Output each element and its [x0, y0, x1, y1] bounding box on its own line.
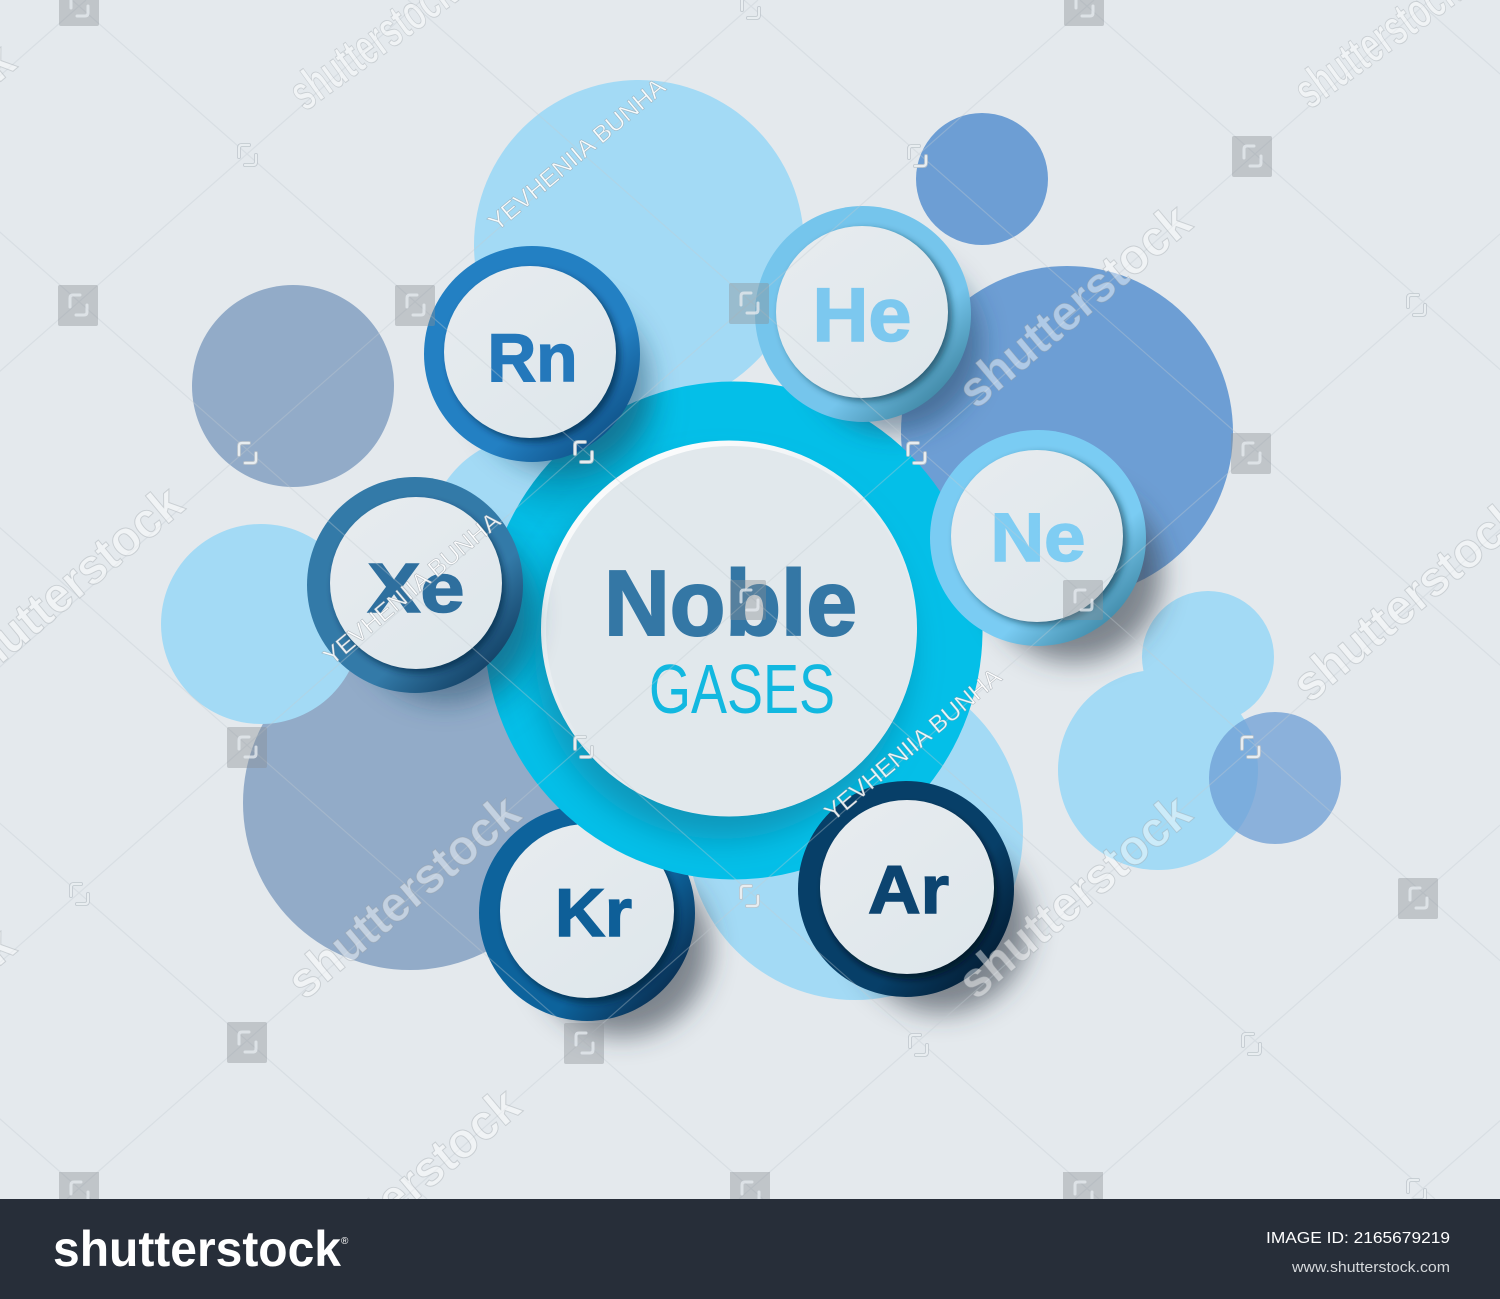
watermark text: shutterstock: [947, 192, 1202, 418]
label: Ne: Ne: [990, 499, 1086, 576]
central ring with title disk: [487, 382, 982, 880]
watermark text: shutterstock: [276, 1076, 531, 1299]
footer bar: [0, 1199, 1500, 1299]
label: Xe: Xe: [368, 549, 464, 627]
label: Rn: Rn: [488, 320, 578, 396]
element circle: Xe: [307, 477, 533, 703]
watermark author credit: YEVHENIIA BUNHA: [484, 73, 671, 237]
label: Ar: Ar: [868, 852, 949, 928]
element circle: He: [755, 206, 981, 432]
element circle: Ne: [930, 430, 1162, 662]
watermark author credit: YEVHENIIA BUNHA: [820, 663, 1007, 827]
subtitle: GASES: GASES: [649, 650, 835, 728]
label: Kr: Kr: [555, 875, 632, 951]
footer registered mark: ®: [341, 1236, 349, 1247]
watermark text: shutterstock: [947, 783, 1202, 1009]
footer image id: IMAGE ID: 2165679219: [1266, 1230, 1450, 1247]
watermark text: shutterstock: [276, 783, 531, 1009]
title: Noble: Noble: [604, 551, 857, 655]
element circle: Rn: [424, 246, 650, 472]
element circle: Kr: [479, 805, 710, 1036]
watermark author credit: [319, 73, 1007, 827]
footer logo: shutterstock: [53, 1221, 341, 1277]
element circle: Ar: [798, 781, 1030, 1013]
decorative background circles: [161, 80, 1341, 1000]
footer url: www.shutterstock.com: [1291, 1259, 1450, 1276]
label: He: He: [812, 273, 912, 358]
watermark author credit: YEVHENIIA BUNHA: [319, 507, 506, 671]
